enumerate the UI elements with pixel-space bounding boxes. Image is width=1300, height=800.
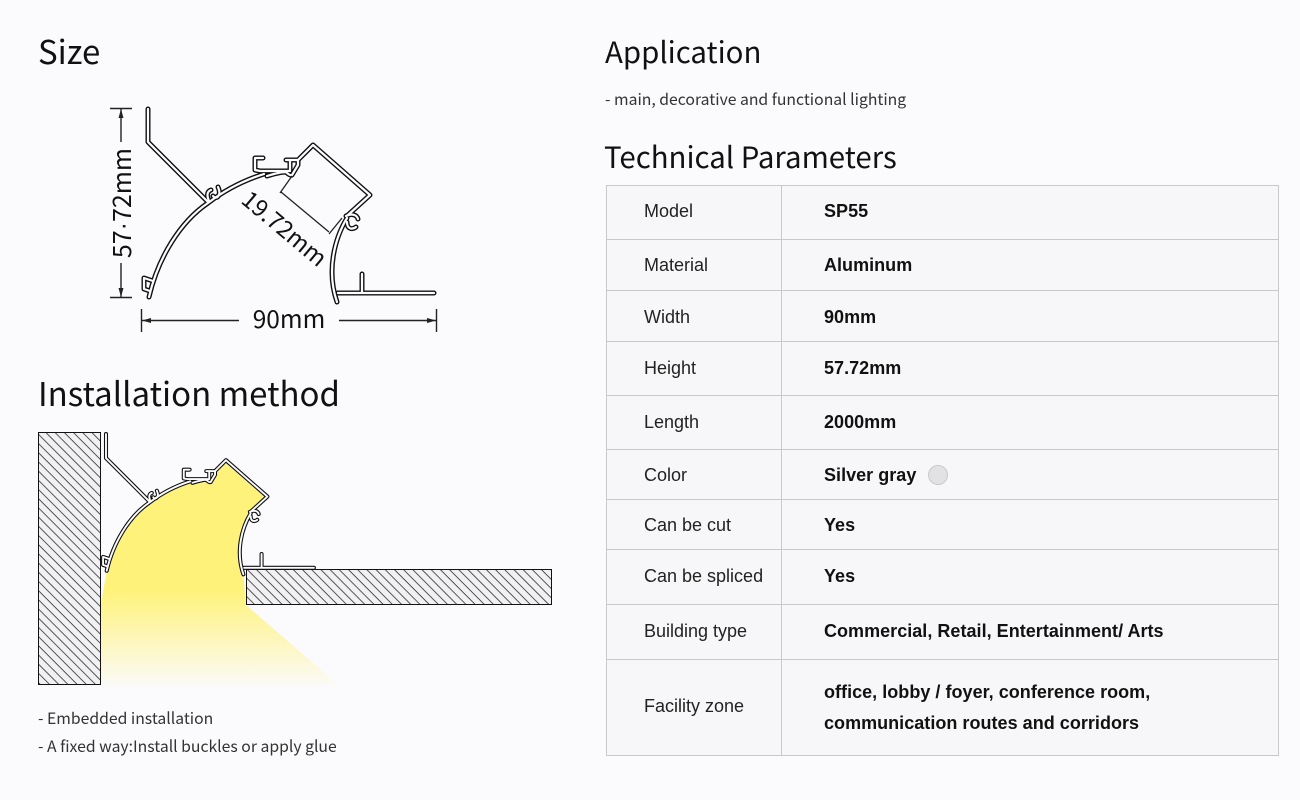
row: color — [606, 450, 1279, 500]
row: facility zone — [606, 660, 1279, 756]
profile cross-section drawing — [144, 109, 434, 302]
row: color: Color — [644, 465, 687, 485]
row: width: Width — [644, 307, 690, 327]
height dimension — [103, 108, 139, 298]
installation note 2: - A fixed way:Install buckles or apply glue — [38, 734, 337, 757]
row: model: Model — [644, 201, 693, 221]
parameters table — [606, 185, 1279, 756]
width dimension: 90mm — [253, 301, 325, 336]
row: facility zone: Facility zone — [644, 696, 744, 716]
wall section — [38, 432, 100, 684]
row: length — [606, 396, 1279, 450]
application text: - main, decorative and functional lighting — [605, 87, 906, 110]
height dimension: 57·72mm — [103, 148, 139, 258]
row: facility zone: communication routes and corridors — [824, 713, 1139, 733]
row: can be cut: Yes — [824, 515, 855, 535]
row: building type: Building type — [644, 621, 747, 641]
heading: installation method: Installation method — [38, 368, 340, 416]
row: color: Silver gray — [824, 465, 916, 485]
row: can be spliced — [606, 550, 1279, 605]
row: can be spliced: Can be spliced — [644, 566, 763, 586]
heading: size: Size — [38, 26, 100, 74]
diagrams — [38, 106, 552, 685]
row: can be cut: Can be cut — [644, 515, 731, 535]
row: height: 57.72mm — [824, 358, 901, 378]
row: material: Aluminum — [824, 255, 912, 275]
inner width dimension: 19.72mm — [235, 181, 336, 273]
installed profile — [103, 434, 314, 574]
row: can be spliced: Yes — [824, 566, 855, 586]
heading: application: Application — [605, 30, 761, 72]
row: facility zone: office, lobby / foyer, conference room, — [824, 682, 1150, 702]
row: building type: Commercial, Retail, Entertainment/ Arts — [824, 621, 1164, 641]
heading: technical parameters: Technical Parameters — [604, 135, 897, 177]
row: model — [606, 185, 1279, 240]
installation light beam — [100, 460, 340, 686]
ceiling section — [246, 570, 552, 604]
row: can be cut — [606, 500, 1279, 550]
row: building type — [606, 605, 1279, 660]
row: width: 90mm — [824, 307, 876, 327]
row: model: SP55 — [824, 201, 868, 221]
row: material: Material — [644, 255, 708, 275]
row: material — [606, 239, 1279, 291]
row: height: Height — [644, 358, 696, 378]
installation note 1: - Embedded installation — [38, 706, 213, 729]
row: length: Length — [644, 412, 699, 432]
width dimension — [142, 301, 436, 336]
row: width — [606, 291, 1279, 342]
row: length: 2000mm — [824, 412, 896, 432]
row: height — [606, 342, 1279, 396]
